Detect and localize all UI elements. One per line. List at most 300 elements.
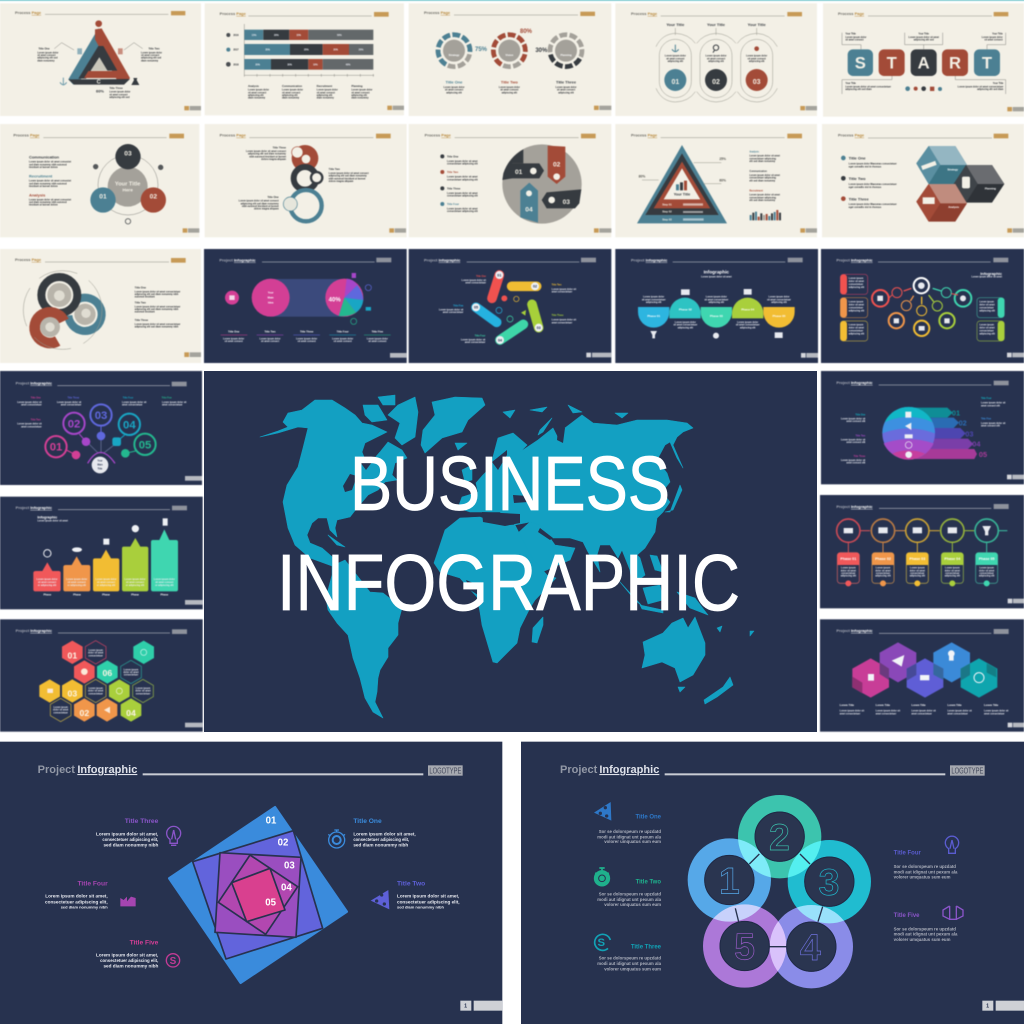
slide title xyxy=(971,271,1003,279)
callout: title one: adipiscing elit sed xyxy=(37,57,58,60)
callout: title one: Lorem ipsum dolor xyxy=(37,52,59,54)
third and fourth rows, right xyxy=(615,249,1024,484)
text blocks: amet consectetuer xyxy=(61,404,81,407)
card text: adipiscing elit xyxy=(910,575,925,578)
right text: euismod tincidunt xyxy=(135,310,155,313)
slide header: Project Infographic xyxy=(836,628,873,633)
card text: adipiscing elit xyxy=(849,286,864,289)
square numbers: 01 xyxy=(266,816,277,827)
ring captions xyxy=(443,79,577,94)
bar text: Lorem ipsum dolor xyxy=(66,579,87,581)
card text: adipiscing elit xyxy=(849,309,864,312)
bar text: sit amet consect xyxy=(68,581,86,584)
square numbers: 05 xyxy=(265,897,277,908)
text block: title five xyxy=(894,913,958,942)
phase cards: Phase 03 xyxy=(909,557,925,561)
bar text: sit amet consect xyxy=(97,581,115,584)
ring three xyxy=(544,29,588,73)
square numbers: 03 xyxy=(284,861,295,872)
small nodes xyxy=(72,432,130,459)
callout text: Lorem ipsum dolor sit amet consectetuer xyxy=(845,85,891,88)
hexagon text: dolor sit amet xyxy=(53,709,69,712)
phase text: sit amet consectetuer xyxy=(673,324,697,327)
circle icons xyxy=(905,412,913,458)
bar text: sit amet consect xyxy=(38,581,56,584)
bar text: Phase xyxy=(160,592,169,596)
hexagon text: dolor sit amet xyxy=(135,690,151,693)
slide header xyxy=(424,257,596,262)
card text: consectetuer xyxy=(910,572,925,575)
slide header xyxy=(220,11,389,17)
ring numerals: 3 xyxy=(819,861,839,903)
page number xyxy=(1008,599,1024,603)
text block: title two: Sor se dolorspeum re upzdatd xyxy=(599,892,661,897)
five columns: Title Three xyxy=(300,330,314,334)
hexagon text: dolor sit amet xyxy=(88,690,104,693)
card text: dolor sit amet xyxy=(979,303,995,306)
right text: Lorem ipsum dolor sit amet consectetuer xyxy=(135,291,180,294)
right text: Lorem ipsum dolor sit xyxy=(981,422,1006,425)
square numbers: 04 xyxy=(281,882,292,893)
panel: step circle slide xyxy=(409,124,611,237)
phase shapes xyxy=(638,298,795,328)
hexagon text: Lorem ipsum xyxy=(53,707,68,709)
text blocks: Lorem ipsum dolor sit xyxy=(162,401,187,404)
hexagon numbers: 03 xyxy=(68,689,77,699)
column text: Lorem Title xyxy=(911,703,926,707)
text blocks: Title One xyxy=(855,413,866,416)
slide header xyxy=(836,504,1009,509)
text blocks: Lorem ipsum dolor sit xyxy=(122,401,147,404)
bottom left large slide xyxy=(0,742,502,1024)
card text: adipiscing elit xyxy=(875,575,891,578)
text block: title three xyxy=(597,945,662,972)
ring captions: Lorem ipsum dolor xyxy=(443,87,465,89)
text blocks: Lorem ipsum dolor sit xyxy=(17,401,42,404)
step list: Title Three xyxy=(447,186,461,190)
bar text: Phase xyxy=(73,592,81,596)
slide header: Project Infographic xyxy=(631,257,668,262)
ribbons xyxy=(909,408,977,459)
text blocks: nibh euismod tincidunt ut laoreet xyxy=(242,205,279,208)
bar text: Phase xyxy=(102,592,110,596)
hexagon text: Lorem ipsum xyxy=(136,688,150,690)
text block: title two: sed diam nonummy nibh xyxy=(397,905,444,910)
title list: eget convallis nisl in rhoncus xyxy=(849,166,882,169)
hexagon numbers: 02 xyxy=(80,708,89,718)
text block: title two: volorer umquatus sum eum xyxy=(604,902,661,907)
column text: Lorem ipsum dolor sit xyxy=(911,709,936,712)
right text: consectetuer adipiscing xyxy=(749,177,777,180)
card text: dolor sit amet xyxy=(979,327,995,330)
slide header xyxy=(425,133,596,138)
text block: title four: sed diam nonummy nibh xyxy=(61,905,108,910)
slide header: Process Page xyxy=(15,10,42,15)
text blocks: adipiscing elit sed diam nonummy xyxy=(241,202,279,205)
column texts: diam nonummy xyxy=(351,98,369,100)
slide header: Project Infographic xyxy=(424,257,461,262)
pillar text xyxy=(665,56,767,63)
slide header: Project Infographic xyxy=(16,628,53,633)
text labels: amet consectetuer xyxy=(443,311,463,314)
right cards xyxy=(977,298,1004,341)
text labels: Lorem ipsum dolor sit xyxy=(462,279,486,282)
phase cards: Phase 01 xyxy=(840,557,856,561)
timeline connectors xyxy=(848,531,1007,553)
text blocks: adipiscing elit sed diam nonummy xyxy=(329,175,367,178)
phase text: adipiscing elit xyxy=(646,301,662,304)
text block: title three: consectetuer adipiscing elit, xyxy=(102,837,158,842)
side text: Analysis xyxy=(29,192,46,197)
slide header: Process Page xyxy=(220,11,247,16)
step list: Title One xyxy=(447,154,459,158)
stacked bar chart: 30% xyxy=(287,64,293,66)
text blocks: amet consectetuer xyxy=(21,425,42,428)
page number xyxy=(460,1001,502,1011)
text labels: Lorem ipsum dolor sit xyxy=(461,338,486,341)
text block: title one: sed diam nonummy nibh xyxy=(353,842,408,847)
text block: title five: Lorem ipsum dolor sit amet, xyxy=(96,952,158,957)
number rings: 04 xyxy=(123,419,136,431)
panel: rotated squares xyxy=(0,742,502,1024)
five columns xyxy=(223,330,388,343)
card text: consectetuer xyxy=(841,572,856,575)
text block: title one: Title One xyxy=(635,815,662,821)
capsules xyxy=(476,275,539,340)
slide header xyxy=(424,10,595,16)
right text: Lorem ipsum dolor sit amet consectetuer xyxy=(135,306,180,309)
column text: Lorem ipsum dolor sit xyxy=(876,709,900,712)
page number xyxy=(1007,228,1024,233)
number rings: 05 xyxy=(139,439,151,451)
icon: dollar refresh xyxy=(595,934,610,950)
slide header: Process Page xyxy=(424,10,451,15)
text block: title three: sed diam nonummy nibh xyxy=(103,842,158,847)
panel: penrose triangle slide xyxy=(0,3,201,116)
page number xyxy=(185,600,203,605)
text block: title two xyxy=(597,880,662,907)
text blocks: Title Four xyxy=(123,396,133,399)
step list: Lorem ipsum dolor sit amet xyxy=(447,207,478,210)
page number xyxy=(800,228,817,233)
text block: title one: consectetuer adipiscing elit, xyxy=(353,837,409,842)
stacked bar chart xyxy=(244,24,374,77)
third and fourth rows, left xyxy=(0,249,611,485)
five columns: sit amet consect xyxy=(368,340,387,343)
slide header xyxy=(836,380,1009,385)
bar text: sit amet consect xyxy=(126,581,144,584)
slide header xyxy=(836,257,1008,262)
striped circle xyxy=(882,407,935,460)
hexagon diagram: Analysis xyxy=(948,205,960,209)
right text: consectetuer adipiscing xyxy=(749,196,777,199)
ring captions: adipiscing elit xyxy=(558,91,574,94)
step circle diagram: 02 xyxy=(553,162,561,169)
step list: Lorem ipsum dolor sit amet xyxy=(447,192,478,195)
icon: bulb xyxy=(167,826,181,845)
chain diagram xyxy=(283,145,322,221)
slide header xyxy=(219,257,391,262)
capsule with pie: Main xyxy=(268,295,274,299)
text labels: Title Four xyxy=(475,334,485,337)
right column lower slides xyxy=(820,495,1024,732)
small center icons xyxy=(496,295,526,322)
panel: START slide xyxy=(823,3,1024,117)
slide header xyxy=(16,505,187,510)
panel: folded hexagons slide xyxy=(820,619,1024,732)
side text: Communication xyxy=(29,155,60,160)
title list xyxy=(841,156,897,209)
numbered circles: 01 xyxy=(671,79,679,86)
text labels: Title Five xyxy=(453,304,464,307)
card text: adipiscing elit xyxy=(979,575,995,578)
circle diagram: Your Title xyxy=(115,181,140,187)
side text: Lorem ipsum dolor sit amet consectet xyxy=(29,180,71,183)
bar text: Phase xyxy=(131,592,139,596)
hero title: INFOGRAPHIC xyxy=(277,538,740,627)
column text: Lorem Title xyxy=(840,703,854,707)
phase shapes: Phase 05 xyxy=(773,314,786,318)
panel: phase timeline slide xyxy=(820,495,1024,608)
text block: title five: Title Five xyxy=(894,913,920,919)
text blocks: Title Two xyxy=(31,418,41,421)
card text: consectetuer xyxy=(979,572,994,575)
icon: triangle network xyxy=(594,802,611,821)
panel: main idea slide xyxy=(204,249,407,363)
ring captions: Lorem ipsum dolor xyxy=(555,87,577,89)
panel: stacked bars slide xyxy=(205,3,404,115)
text block: title one: volorer umquatus sum eum xyxy=(604,839,661,844)
capsule numbers xyxy=(472,271,543,344)
text blocks: Lorem ipsum dolor sit xyxy=(841,417,866,420)
stacked bar chart: 15% xyxy=(252,35,257,37)
page number xyxy=(185,723,203,727)
panel: overlapping rings slide xyxy=(0,249,201,363)
slide header: LOGOTYPE xyxy=(429,766,461,776)
phase icons xyxy=(650,289,783,339)
capsule with pie: Idea xyxy=(268,300,274,304)
pyramid: Step 01 xyxy=(662,202,672,206)
text blocks: amet consectetuer xyxy=(162,404,183,407)
right text xyxy=(135,286,180,328)
slide header xyxy=(838,11,1008,16)
circle diagram: 03 xyxy=(124,150,132,157)
hexagon icons xyxy=(868,650,984,683)
text labels: Title Three xyxy=(552,314,564,317)
column texts: adipiscing elit xyxy=(248,94,264,97)
phase cards: Phase 05 xyxy=(979,557,995,561)
slide header xyxy=(631,11,802,16)
callout text: Your Title xyxy=(918,33,930,36)
circle diagram: 01 xyxy=(99,193,107,200)
ring numerals: 5 xyxy=(734,925,755,967)
panel: node network slide xyxy=(821,249,1024,363)
text block: title five: sed diam nonummy nibh xyxy=(103,964,158,969)
text block: title four: Title Four xyxy=(77,880,108,887)
card text: dolor sit amet xyxy=(849,327,864,330)
column texts: adipiscing elit xyxy=(282,94,298,97)
icon: triangle network xyxy=(371,890,389,909)
phase text: Lorem ipsum dolor xyxy=(675,322,696,324)
bar text: Phase xyxy=(43,592,52,596)
column texts: diam nonummy xyxy=(317,98,335,100)
number rings: 02 xyxy=(68,418,80,430)
title list: Lorem ipsum dolor Maecenas consectetuer xyxy=(849,163,897,166)
slide header xyxy=(836,628,1009,634)
icon: dollar refresh: S xyxy=(598,937,606,949)
hexagon text: consectetuer xyxy=(124,674,138,677)
hexagon text: dolor sit amet xyxy=(123,671,139,674)
text block: title four: Sor se dolorspeum re upzdatd xyxy=(894,864,956,869)
triangle diagram xyxy=(68,20,130,85)
callout text: Lorem ipsum dolor sit amet xyxy=(908,36,939,39)
ring captions: sit amet consect xyxy=(557,89,575,92)
callout: title three: sit amet consect xyxy=(109,93,128,96)
slide header: Process Page xyxy=(838,11,865,16)
side text: tincidunt ut laoreet dolore xyxy=(29,166,58,169)
five columns: Lorem ipsum dolor xyxy=(259,338,281,340)
pillar text: adipiscing elit xyxy=(668,60,683,63)
text block: title five: Sor se dolorspeum re upzdatd xyxy=(894,926,956,931)
START tiles xyxy=(848,49,1000,76)
text labels: amet consectetuer xyxy=(552,321,572,324)
text labels: Title One xyxy=(476,275,487,278)
column texts: sit amet consect xyxy=(317,91,335,94)
slide header: Project Infographic xyxy=(836,504,873,509)
callout: title two: Title Two xyxy=(148,47,160,51)
column texts: adipiscing elit xyxy=(317,94,332,97)
text block: title five: volorer umquatus sum eum xyxy=(894,937,951,942)
text block: title three: Title Three xyxy=(125,818,159,825)
step list: consectetuer adipiscing elit xyxy=(447,178,478,181)
page number xyxy=(1007,475,1024,479)
hexagon numbers xyxy=(68,650,136,718)
card text: adipiscing elit xyxy=(979,333,995,336)
ring numerals: 2 xyxy=(769,816,790,858)
slide header xyxy=(15,10,185,15)
text blocks: Title Two xyxy=(329,167,340,171)
right text xyxy=(749,151,780,202)
text block: title five: consectetuer adipiscing elit, xyxy=(100,958,158,963)
pillar text: Lorem ipsum dolor xyxy=(665,56,686,58)
pillar outlines xyxy=(656,28,777,102)
five columns: Lorem ipsum dolor xyxy=(332,338,353,340)
bar text: Lorem ipsum dolor xyxy=(95,579,117,581)
text blocks: Lorem ipsum dolor sit xyxy=(841,438,866,441)
card text: Lorem ipsum xyxy=(979,301,994,303)
percentages: 30% xyxy=(535,48,548,54)
right text: Title Five xyxy=(981,417,992,420)
bar text: Lorem ipsum dolor xyxy=(36,579,58,581)
circle diagram: Here xyxy=(122,188,133,193)
text block: title two: Title Two xyxy=(397,880,425,887)
icon: bars xyxy=(120,897,136,906)
text block: title one: Lorem ipsum dolor sit amet, xyxy=(353,832,416,837)
left column lower slides xyxy=(0,497,203,732)
card text: adipiscing elit xyxy=(841,575,856,578)
text blocks: dolore magna aliquam xyxy=(254,209,279,211)
card text xyxy=(849,278,995,336)
column texts: sit amet consect xyxy=(248,91,266,94)
side text: Lorem ipsum dolor sit amet consectet xyxy=(29,161,71,164)
text block: title two xyxy=(397,880,460,910)
pillar titles: Your Title xyxy=(748,22,766,27)
column texts: Analysis xyxy=(248,84,259,88)
panel: numbered rings slide xyxy=(0,371,202,485)
percentages xyxy=(475,29,548,54)
text block: title four xyxy=(45,880,108,910)
column text: amet consectetuer xyxy=(947,712,968,715)
hexagon diagram xyxy=(916,146,1004,222)
pyramid: Step 02 xyxy=(662,210,672,214)
text block: title four: Lorem ipsum dolor sit amet, xyxy=(45,894,108,899)
title list: Title One xyxy=(849,156,866,161)
bar text xyxy=(36,579,175,596)
right text: adipiscing elit sed diam nonummy nibh xyxy=(135,325,179,328)
card text: Lorem ipsum xyxy=(979,325,994,327)
slide header: LOGOTYPE xyxy=(951,766,983,776)
text blocks xyxy=(239,145,369,211)
stacked bar chart: 15% xyxy=(296,35,302,37)
phase text xyxy=(642,297,791,329)
panel: hexagon trio slide xyxy=(822,124,1024,237)
page number xyxy=(594,106,611,110)
column texts xyxy=(248,84,373,100)
bar text: Lorem ipsum dolor xyxy=(154,579,175,581)
phase text: Lorem ipsum dolor xyxy=(768,297,790,299)
slide header: Process Page xyxy=(15,257,42,262)
side text: tincidunt ut laoreet dolore xyxy=(29,204,58,207)
pyramid: Step 03 xyxy=(662,218,672,222)
panel: three circles slide xyxy=(0,124,199,237)
icon: dollar refresh: S xyxy=(170,956,177,967)
title list: eget convallis nisl in rhoncus xyxy=(849,206,882,209)
ribbon numbers: 04 xyxy=(972,440,981,449)
value labels: 60% xyxy=(719,179,726,183)
right text: Title One xyxy=(135,286,147,290)
page number xyxy=(982,1001,1024,1011)
page number xyxy=(594,228,611,233)
callout text: Lorem ipsum dolor sit amet consectetuer xyxy=(958,85,1003,88)
ring connectors xyxy=(735,854,823,947)
nested squares xyxy=(169,807,347,983)
text block: title three: Lorem ipsum dolor sit amet, xyxy=(96,832,158,837)
card text: consectetuer xyxy=(945,572,960,575)
right half of top rows xyxy=(615,3,1024,237)
capsule numbers: 02 xyxy=(533,285,537,289)
slide title: Infographic xyxy=(704,269,729,274)
ring numerals: 4 xyxy=(800,926,821,968)
START tiles: S xyxy=(855,54,866,73)
column text: Lorem ipsum dolor sit xyxy=(984,709,1009,712)
text blocks: Lorem ipsum dolor sit amet consect xyxy=(239,200,279,203)
slide header: Process Page xyxy=(631,11,658,16)
slide header xyxy=(560,764,985,776)
text block: title two: Lorem ipsum dolor sit amet, xyxy=(397,894,459,899)
ring two: Vision xyxy=(505,53,514,57)
bar text: or adipiscing elit xyxy=(155,584,174,587)
right text: Lorem ipsum dolor sit amet xyxy=(749,194,780,197)
card text: adipiscing elit xyxy=(945,575,960,578)
text labels: Lorem ipsum dolor sit xyxy=(552,319,576,322)
outlined hexagons xyxy=(50,641,153,722)
card text: Lorem ipsum xyxy=(945,568,960,570)
year labels: 2017 xyxy=(233,50,239,52)
callout text: Your Title xyxy=(845,33,857,36)
phase cards: Phase 02 xyxy=(875,557,891,561)
year labels: 2018 xyxy=(233,64,239,66)
bar text: or adipiscing elit xyxy=(97,584,115,587)
